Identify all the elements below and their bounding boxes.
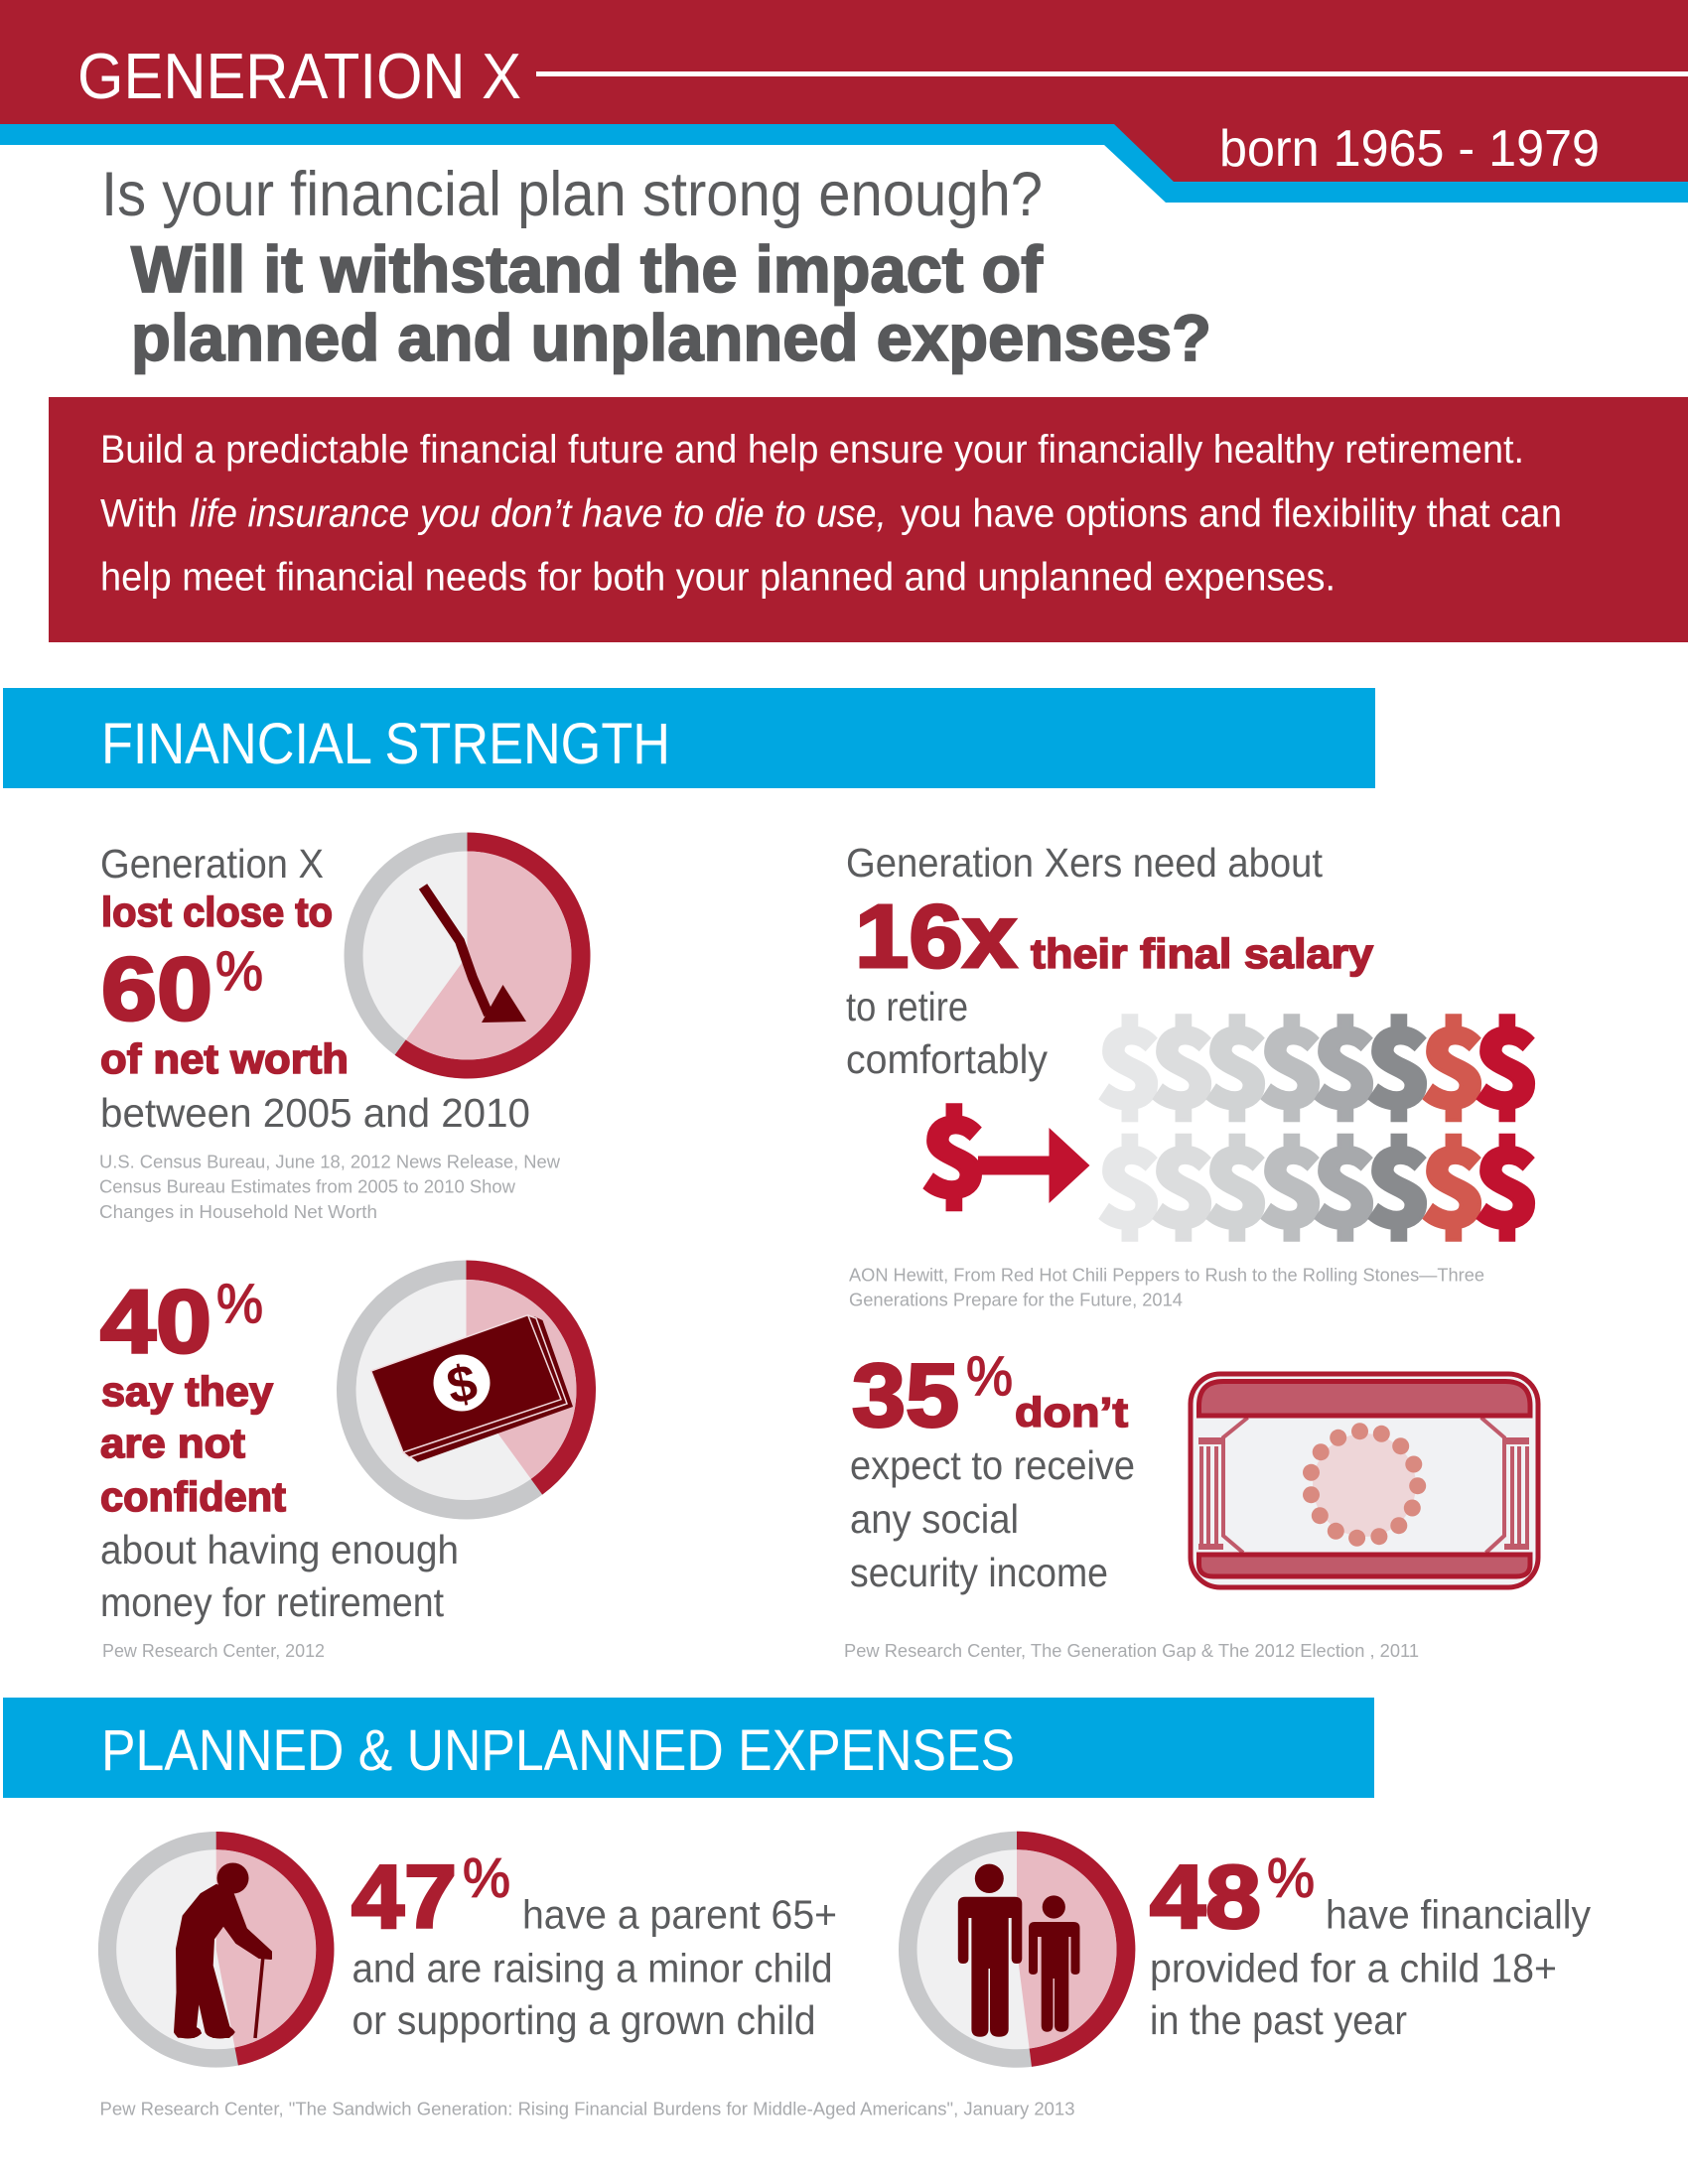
text: generation x lost 60 percent: between 2005 and 2010 (100, 1090, 530, 1136)
source: census bureau: Changes in Household Net Worth (99, 1201, 377, 1222)
panel: net worth statistic (99, 832, 591, 1222)
text: generation x lost 60 percent: of net worth (100, 1035, 349, 1082)
headline question: planned and unplanned expenses? (131, 301, 1211, 374)
text: 48 percent provided for a child (1150, 1846, 1591, 2043)
source: pew generation gap: Pew Research Center, The Generation Gap & The 2012 Election , 2011 (844, 1640, 1419, 1661)
icon: 47 percent donut with elderly person (98, 1832, 334, 2068)
text: 40 percent not confident: about having enough (100, 1527, 459, 1572)
icon: social security card (1191, 1374, 1538, 1587)
panel: adult child support statistic (899, 1832, 1591, 2068)
chart: bottom row of dollar signs: $ (1150, 1104, 1217, 1259)
text: 48 percent provided for a child: have financially (1326, 1892, 1591, 1938)
text: 48 percent provided for a child: 48 (1150, 1848, 1261, 1948)
text: 40 percent not confident: money for retirement (100, 1579, 445, 1625)
icon: dollar sign with arrow: $ (920, 1073, 988, 1228)
panel: intro message: life insurance you don’t have to die to use, (190, 492, 887, 536)
title: GENERATION X (77, 40, 521, 112)
text: 40 percent not confident: 40 (100, 1273, 211, 1372)
chart: bottom row of dollar signs: $ (1258, 1104, 1326, 1259)
chart: top row of dollar signs: $ (1258, 984, 1326, 1139)
section heading: financial strength (3, 688, 1375, 788)
headline question: Will it withstand the impact of (131, 232, 1044, 306)
header banner (0, 0, 1688, 203)
text: 47 percent have a parent 65+: have a parent 65+ (522, 1892, 837, 1938)
chart: top row of dollar signs: $ (1096, 984, 1164, 1139)
chart: bottom row of dollar signs: $ (1420, 1104, 1487, 1259)
icon: dollar sign with arrow (920, 1073, 1090, 1228)
chart: top row of dollar signs: $ (1150, 984, 1217, 1139)
chart: bottom row of dollar signs: $ (1096, 1104, 1164, 1259)
section heading: planned and unplanned expenses: PLANNED & UNPLANNED EXPENSES (101, 1718, 1015, 1783)
text: 16x final salary: comfortably (846, 1036, 1048, 1082)
text: 16x final salary (846, 840, 1374, 1082)
text: 47 percent have a parent 65+: and are raising a minor child (352, 1946, 832, 1991)
panel: intro message: With (100, 492, 178, 536)
text: 47 percent have a parent 65+ (352, 1846, 837, 2043)
chart: top row of dollar signs: $ (1420, 984, 1487, 1139)
text: 40 percent not confident (100, 1272, 459, 1625)
section heading: planned and unplanned expenses (3, 1698, 1374, 1798)
source: pew sandwich generation: Pew Research Center, "The Sandwich Generation: Rising Financial Burdens for Middle-Aged Americans", January 2013 (99, 2099, 1074, 2118)
text: generation x lost 60 percent: 60 (101, 940, 212, 1039)
text: 47 percent have a parent 65+: 47 (352, 1848, 457, 1948)
text: 35 percent social security: % (966, 1344, 1013, 1407)
panel: intro message (49, 397, 1688, 642)
icon: 60 percent donut with falling arrow (344, 832, 591, 1078)
chart: top row of dollar signs: $ (1365, 984, 1433, 1139)
source: aon hewitt (849, 1265, 1484, 1310)
chart: bottom row of dollar signs: $ (1203, 1104, 1271, 1259)
text: 47 percent have a parent 65+: % (463, 1846, 510, 1908)
chart: top row of dollar signs: $ (1312, 984, 1379, 1139)
icon: 48 percent donut with adult and child (899, 1832, 1135, 2068)
text: 35 percent social security: don’t (1015, 1389, 1128, 1435)
text: generation x lost 60 percent (100, 841, 530, 1136)
panel: intro message: Build a predictable financial future and help ensure your financially healthy retirement. (100, 428, 1524, 472)
section heading: financial strength: FINANCIAL STRENGTH (101, 712, 670, 776)
text: 35 percent social security: 35 (852, 1346, 959, 1445)
text: 40 percent not confident: confident (100, 1473, 286, 1520)
chart: top row of dollar signs: $ (1474, 984, 1541, 1139)
chart: bottom row of dollar signs: $ (1312, 1104, 1379, 1259)
chart: bottom row of dollar signs: $ (1365, 1104, 1433, 1259)
chart: bottom row of dollar signs (1096, 1104, 1541, 1259)
text: 47 percent have a parent 65+: or supporting a grown child (352, 1997, 816, 2043)
birth years label: born 1965 - 1979 (1219, 120, 1600, 178)
chart: top row of dollar signs (1096, 984, 1541, 1139)
panel: retirement confidence statistic (100, 1261, 596, 1661)
text: 35 percent social security: expect to receive (850, 1442, 1135, 1488)
panel: sandwich generation parent statistic (98, 1832, 837, 2068)
text: 40 percent not confident: say they (101, 1368, 274, 1415)
text: 40 percent not confident: are not (100, 1420, 245, 1466)
icon: 40 percent donut with money stack: $ (442, 1354, 483, 1416)
source: aon hewitt: AON Hewitt, From Red Hot Chili Peppers to Rush to the Rolling Stones—Three (849, 1265, 1484, 1285)
text: 40 percent not confident: % (216, 1272, 263, 1334)
text: 16x final salary: 16x (855, 887, 1017, 987)
text: 48 percent provided for a child: in the past year (1150, 1997, 1407, 2043)
text: 35 percent social security: any social (850, 1496, 1019, 1542)
text: generation x lost 60 percent: Generation X (100, 841, 324, 887)
chart: bottom row of dollar signs: $ (1474, 1104, 1541, 1259)
text: 16x final salary: their final salary (1031, 930, 1374, 977)
text: generation x lost 60 percent: % (215, 939, 263, 1002)
panel: social security statistic (844, 1344, 1538, 1661)
text: 35 percent social security (850, 1344, 1135, 1595)
source: aon hewitt: Generations Prepare for the Future, 2014 (849, 1289, 1183, 1310)
source: census bureau: U.S. Census Bureau, June 18, 2012 News Release, New (99, 1152, 561, 1171)
panel: 16x salary statistic (846, 840, 1541, 1310)
text: 16x final salary: to retire (846, 984, 968, 1029)
source: census bureau (99, 1152, 561, 1222)
icon: 40 percent donut with money stack (337, 1261, 596, 1519)
text: 35 percent social security: security income (850, 1550, 1108, 1595)
text: generation x lost 60 percent: lost close to (101, 888, 333, 935)
headline question (101, 160, 1211, 374)
headline question: Is your financial plan strong enough? (101, 160, 1043, 229)
text: 16x final salary: Generation Xers need about (846, 840, 1324, 886)
panel: intro message: you have options and flexibility that can (901, 492, 1562, 536)
source: census bureau: Census Bureau Estimates from 2005 to 2010 Show (99, 1175, 516, 1197)
text: 48 percent provided for a child: provided for a child 18+ (1150, 1946, 1557, 1991)
chart: top row of dollar signs: $ (1203, 984, 1271, 1139)
text: 48 percent provided for a child: % (1267, 1846, 1315, 1908)
source: pew 2012: Pew Research Center, 2012 (102, 1640, 325, 1661)
panel: intro message: help meet financial needs for both your planned and unplanned expenses. (100, 556, 1336, 600)
